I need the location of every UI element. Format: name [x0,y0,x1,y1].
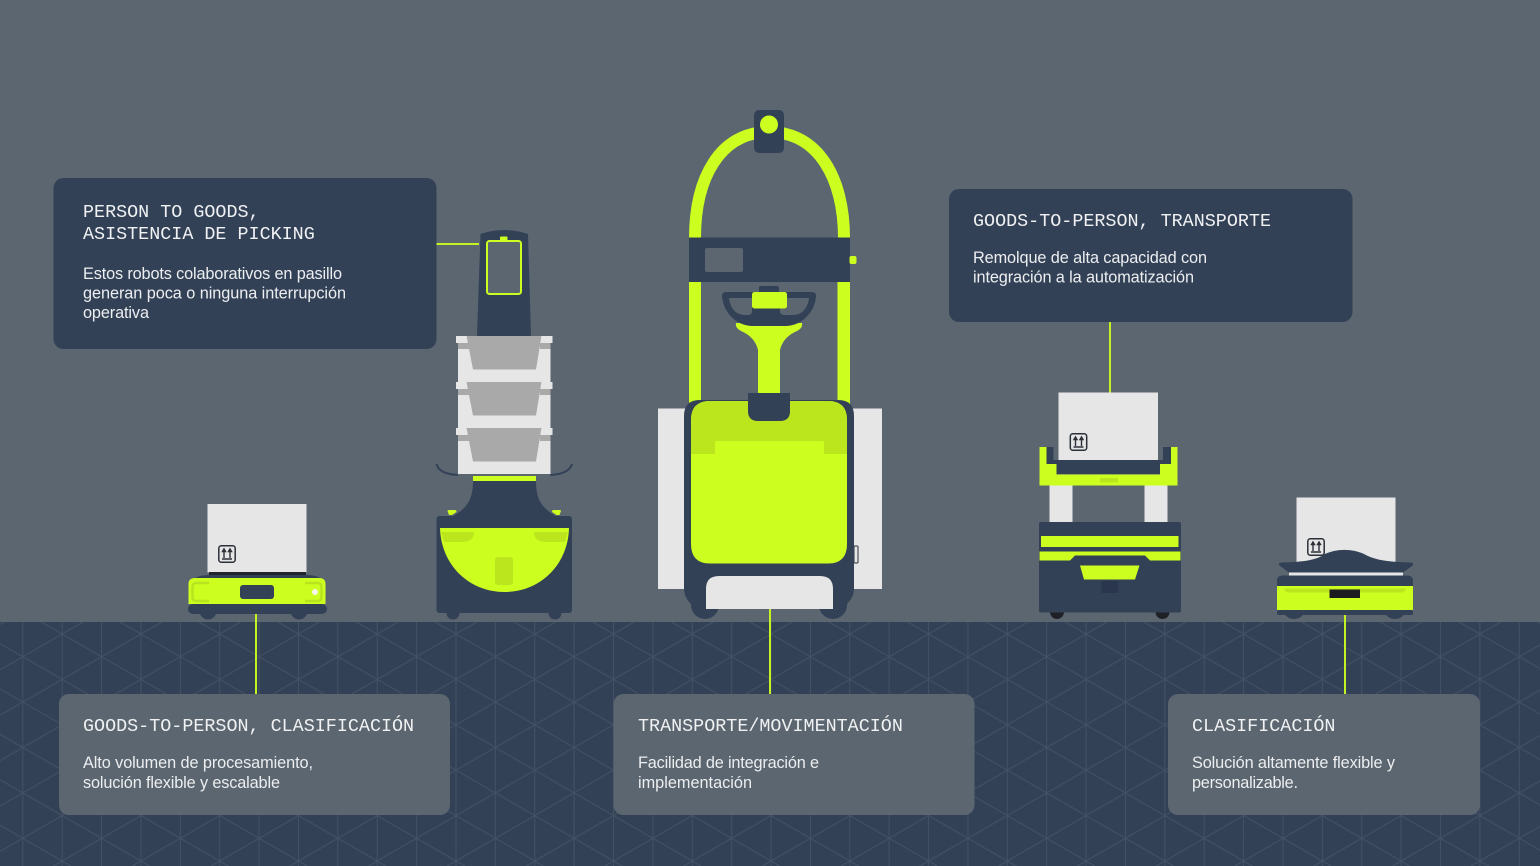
lime tray [1040,447,1178,486]
box [208,504,306,572]
box [1296,498,1396,564]
panel: transporte/movimentación [614,694,974,815]
wheels [691,591,847,619]
robot: goods-to-person transport trailer [1039,392,1181,619]
panel: goods-to-person clasificación [59,694,450,815]
head with sensor [754,110,784,153]
description: personalizable. [1192,774,1298,792]
robot: picking assistant with trays [436,230,572,620]
panel: person to goods [54,178,436,349]
arch [695,132,844,238]
robot: goods-to-person sorter [188,504,327,620]
connector: clasificación right [1344,615,1346,694]
tray cover [1279,550,1413,572]
band [689,238,856,282]
description: Facilidad de integración e [638,754,819,772]
description: Alto volumen de procesamiento, [83,754,313,772]
heading: CLASIFICACIÓN [1192,715,1335,737]
description: integración a la automatización [973,268,1194,286]
description: generan poca o ninguna interrupción [83,284,346,302]
robot: transport tugger [658,110,882,619]
connector: clasificación left [255,614,257,694]
box [1058,392,1158,460]
tower with battery [477,230,531,336]
steering handle [722,286,816,396]
wheels [1050,605,1170,619]
lime chassis [188,578,326,604]
description: Estos robots colaborativos en pasillo [83,265,342,283]
heading: ASISTENCIA DE PICKING [83,224,315,245]
description: solución flexible y escalable [83,774,280,792]
connector: goods-to-person transporte [1109,322,1111,393]
body [684,393,854,609]
base [436,516,572,613]
description: Solución altamente flexible y [1192,754,1396,772]
side panels [658,408,882,589]
wheels [1284,603,1405,619]
description: implementación [638,774,752,792]
body [1277,576,1413,615]
background [0,0,1540,622]
wheels [200,602,308,620]
connector: transporte [769,609,771,694]
panel: clasificación [1168,694,1480,815]
base [1039,522,1181,612]
heading: GOODS-TO-PERSON, CLASIFICACIÓN [83,715,414,737]
wheels [446,606,562,620]
panel: goods-to-person transporte [949,189,1352,322]
floor with triangular grid [0,622,1540,866]
connector: person to goods [436,243,479,245]
heading: GOODS-TO-PERSON, TRANSPORTE [973,211,1271,232]
robot: sorting tilt tray [1277,498,1413,619]
uprights [689,282,850,404]
description: operativa [83,304,150,322]
heading: PERSON TO GOODS, [83,202,260,223]
legs [1050,486,1168,522]
heading: TRANSPORTE/MOVIMENTACIÓN [638,715,903,737]
tray stack [456,336,552,474]
description: Remolque de alta capacidad con [973,249,1207,267]
